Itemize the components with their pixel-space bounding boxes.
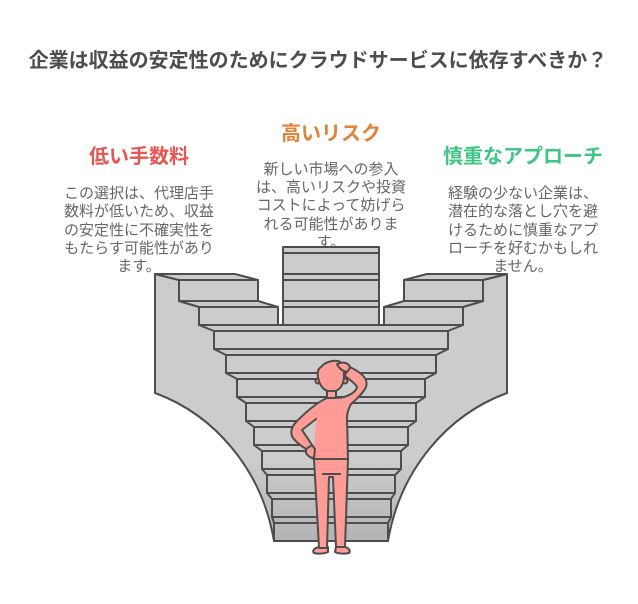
heading: high risk: 高いリスク xyxy=(281,122,381,145)
description: low fees: の安定性に不確実性を xyxy=(64,222,214,239)
staircase walls xyxy=(155,274,507,541)
head xyxy=(318,361,344,391)
title: 企業は収益の安定性のためにクラウドサービスに依存すべきか？ xyxy=(29,49,607,72)
description: low fees: もたらす可能性があり xyxy=(64,240,214,257)
left stairs xyxy=(155,274,278,325)
feet xyxy=(313,547,350,554)
heading: cautious approach: 慎重なアプローチ xyxy=(443,145,603,168)
heading: low fees: 低い手数料 xyxy=(89,145,189,168)
description: high risk: 新しい市場への参入 xyxy=(263,161,399,178)
description: low fees: 数料が低いため、収益 xyxy=(64,203,214,220)
lower stairs xyxy=(199,325,463,541)
crotch line xyxy=(322,473,341,475)
neck xyxy=(327,388,336,399)
ears xyxy=(316,378,348,384)
description: cautious approach: けるために慎重なアプ xyxy=(448,222,598,239)
description: low fees: この選択は、代理店手 xyxy=(64,185,214,202)
text block: low fees xyxy=(64,145,214,275)
hand on head xyxy=(337,363,350,372)
description: cautious approach: 経験の少ない企業は、 xyxy=(448,185,598,202)
description: high risk: コストによって妨げら xyxy=(257,197,405,214)
description: high risk: す。 xyxy=(317,234,345,251)
legs xyxy=(314,459,348,548)
description: cautious approach: ません。 xyxy=(493,258,553,275)
description: cautious approach: ローチを好むかもしれ xyxy=(448,240,598,257)
description: low fees: ます。 xyxy=(117,258,161,275)
description: high risk: れる可能性がありま xyxy=(263,216,399,233)
torso and arms xyxy=(291,366,367,459)
description: high risk: は、高いリスクや投資 xyxy=(256,179,406,196)
inner left arm xyxy=(302,419,316,449)
wrist xyxy=(306,445,315,458)
middle tower stairs xyxy=(283,247,379,325)
staircase illustration xyxy=(155,247,507,541)
right stairs xyxy=(384,274,507,325)
text block: cautious approach xyxy=(443,145,603,275)
text block: high risk xyxy=(256,122,406,251)
person scratching head xyxy=(291,361,367,554)
description: cautious approach: 潜在的な落とし穴を避 xyxy=(448,203,598,220)
